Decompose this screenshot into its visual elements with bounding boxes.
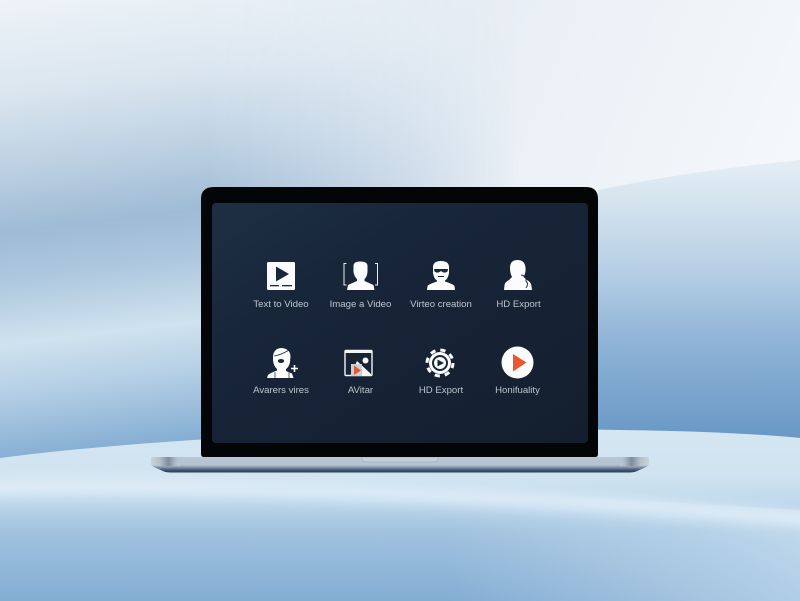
icon: image window with play bbox=[345, 350, 372, 376]
icon: person in frame bbox=[344, 262, 378, 290]
feature: HD Export (gear) bbox=[419, 350, 463, 396]
feature: HD Export: HD Export bbox=[496, 299, 541, 310]
feature: Image a Video bbox=[330, 262, 391, 310]
background: floor surface bbox=[0, 429, 800, 601]
background: floor right glow bbox=[514, 507, 800, 601]
feature: AVitar bbox=[345, 350, 374, 396]
feature: Honifuality: Honifuality bbox=[495, 385, 540, 396]
background: left blue band bbox=[0, 48, 487, 458]
feature: AVitar: AVitar bbox=[348, 385, 374, 396]
feature: HD Export bbox=[496, 260, 541, 310]
feature: Virteo creation bbox=[410, 261, 472, 310]
laptop lid bbox=[201, 187, 598, 457]
laptop base bbox=[151, 457, 649, 472]
icon: person with microphone bbox=[504, 260, 532, 290]
icon: avatar add bbox=[267, 348, 298, 378]
icon grid bbox=[253, 260, 541, 396]
icon: video document bbox=[267, 262, 295, 290]
feature: Text to Video bbox=[253, 262, 309, 310]
feature: HD Export (gear): HD Export bbox=[419, 385, 463, 396]
background: floor highlight bbox=[0, 487, 800, 520]
feature: Avarers vires bbox=[253, 348, 309, 396]
icon: person with sunglasses bbox=[427, 261, 455, 290]
laptop screen bbox=[212, 203, 588, 443]
feature: Text to Video: Text to Video bbox=[253, 299, 309, 310]
feature: Image a Video: Image a Video bbox=[330, 299, 391, 310]
feature: Virteo creation: Virteo creation bbox=[410, 299, 472, 310]
laptop bbox=[151, 187, 649, 472]
background: right swoop bbox=[598, 160, 800, 445]
icon: round play button bbox=[502, 346, 534, 378]
laptop notch bbox=[362, 457, 438, 462]
feature: Honifuality bbox=[495, 346, 540, 396]
icon: gear with play bbox=[427, 350, 453, 376]
feature: Avarers vires: Avarers vires bbox=[253, 385, 309, 396]
